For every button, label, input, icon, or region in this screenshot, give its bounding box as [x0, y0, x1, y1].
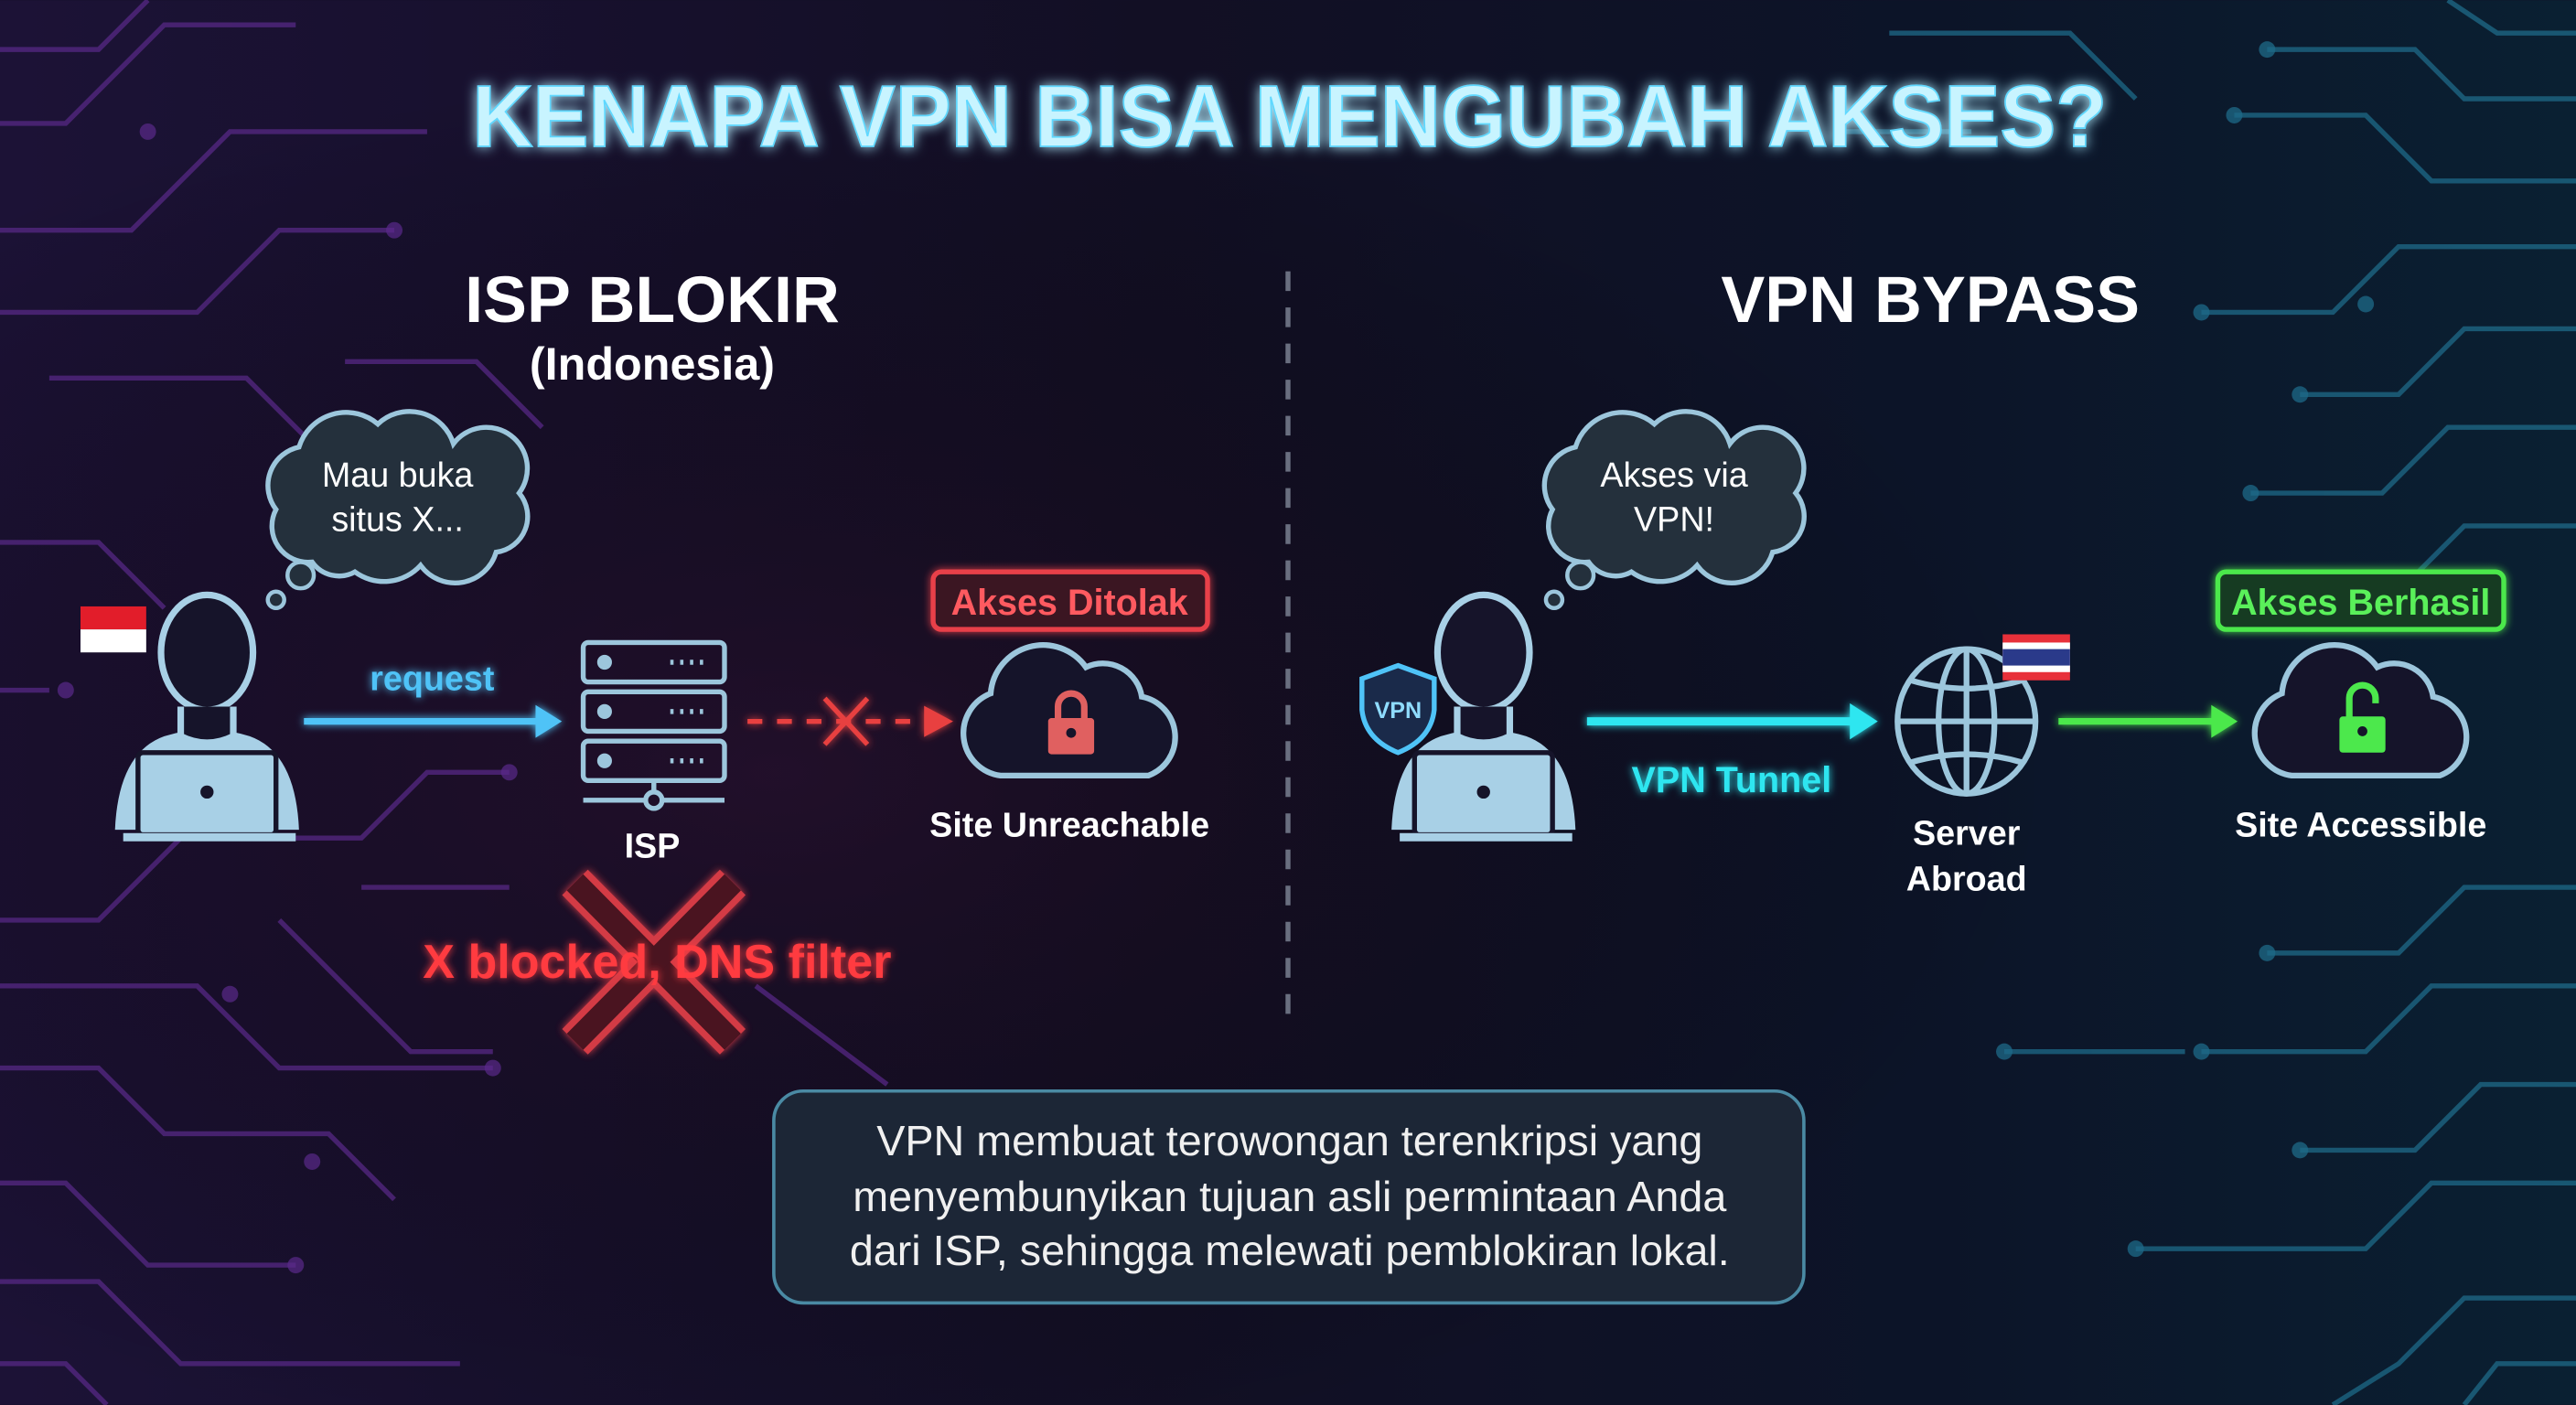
- badge: Akses Berhasil: Akses Berhasil: [2231, 583, 2490, 623]
- badge: Akses Berhasil: [2217, 572, 2504, 629]
- arrow: request: request: [370, 660, 495, 698]
- thought bubble right: Akses via: [1600, 456, 1748, 494]
- label: Site Unreachable: Site Unreachable: [929, 805, 1209, 843]
- arrow: VPN Tunnel: [1587, 703, 1878, 800]
- badge: Akses Ditolak: [933, 572, 1208, 629]
- icon: user with laptop: [115, 595, 299, 842]
- thought bubble left: situs X...: [331, 499, 464, 538]
- heading: ISP BLOKIR: [465, 263, 840, 390]
- icon: unlocked cloud: [2255, 645, 2466, 776]
- heading: ISP BLOKIR: (Indonesia): [530, 338, 775, 390]
- icon: big red X with DNS filter label: X blocked, DNS filter: [423, 936, 891, 989]
- heading: VPN BYPASS: VPN BYPASS: [1721, 263, 2140, 337]
- label: Server Abroad: Server: [1913, 813, 2021, 852]
- label: Server Abroad: [1906, 813, 2027, 898]
- label: ISP: ISP: [625, 827, 680, 865]
- thought bubble left: Mau buka: [322, 456, 473, 494]
- icon: locked cloud: [963, 645, 1175, 776]
- icon: ISP server: [584, 642, 724, 809]
- callout: explanation: [774, 1091, 1804, 1303]
- icon: globe server: [1897, 649, 2035, 794]
- thought bubble left: [268, 412, 528, 608]
- arrow: VPN Tunnel: VPN Tunnel: [1632, 760, 1831, 800]
- label: Site Accessible: Site Accessible: [2235, 805, 2486, 843]
- icon: Thailand flag: [2002, 634, 2070, 681]
- thought bubble right: [1544, 412, 1804, 608]
- title: KENAPA VPN BISA MENGUBAH AKSES?: [472, 69, 2107, 166]
- arrow: blocked dashed: [747, 699, 948, 745]
- thought bubble right: VPN!: [1634, 499, 1714, 538]
- label: Server Abroad: Abroad: [1906, 860, 2027, 898]
- icon: user with laptop and VPN shield: [1362, 595, 1575, 842]
- heading: ISP BLOKIR: ISP BLOKIR: [465, 263, 840, 337]
- callout: explanation: menyembunyikan tujuan asli permintaan Anda: [853, 1173, 1726, 1220]
- icon: Indonesia flag: [80, 606, 146, 652]
- arrow: request: [304, 660, 562, 738]
- badge: Akses Ditolak: Akses Ditolak: [951, 583, 1188, 623]
- callout: explanation: VPN membuat terowongan terenkripsi yang: [876, 1117, 1702, 1164]
- panel: ISP blokir: [80, 412, 1209, 1042]
- callout: explanation: dari ISP, sehingga melewati pemblokiran lokal.: [850, 1227, 1730, 1274]
- panel: VPN bypass: [1362, 412, 2504, 898]
- arrow: green: [2058, 705, 2238, 738]
- icon: big red X with DNS filter label: [423, 883, 891, 1042]
- icon: user with laptop and VPN shield: VPN: [1374, 698, 1422, 724]
